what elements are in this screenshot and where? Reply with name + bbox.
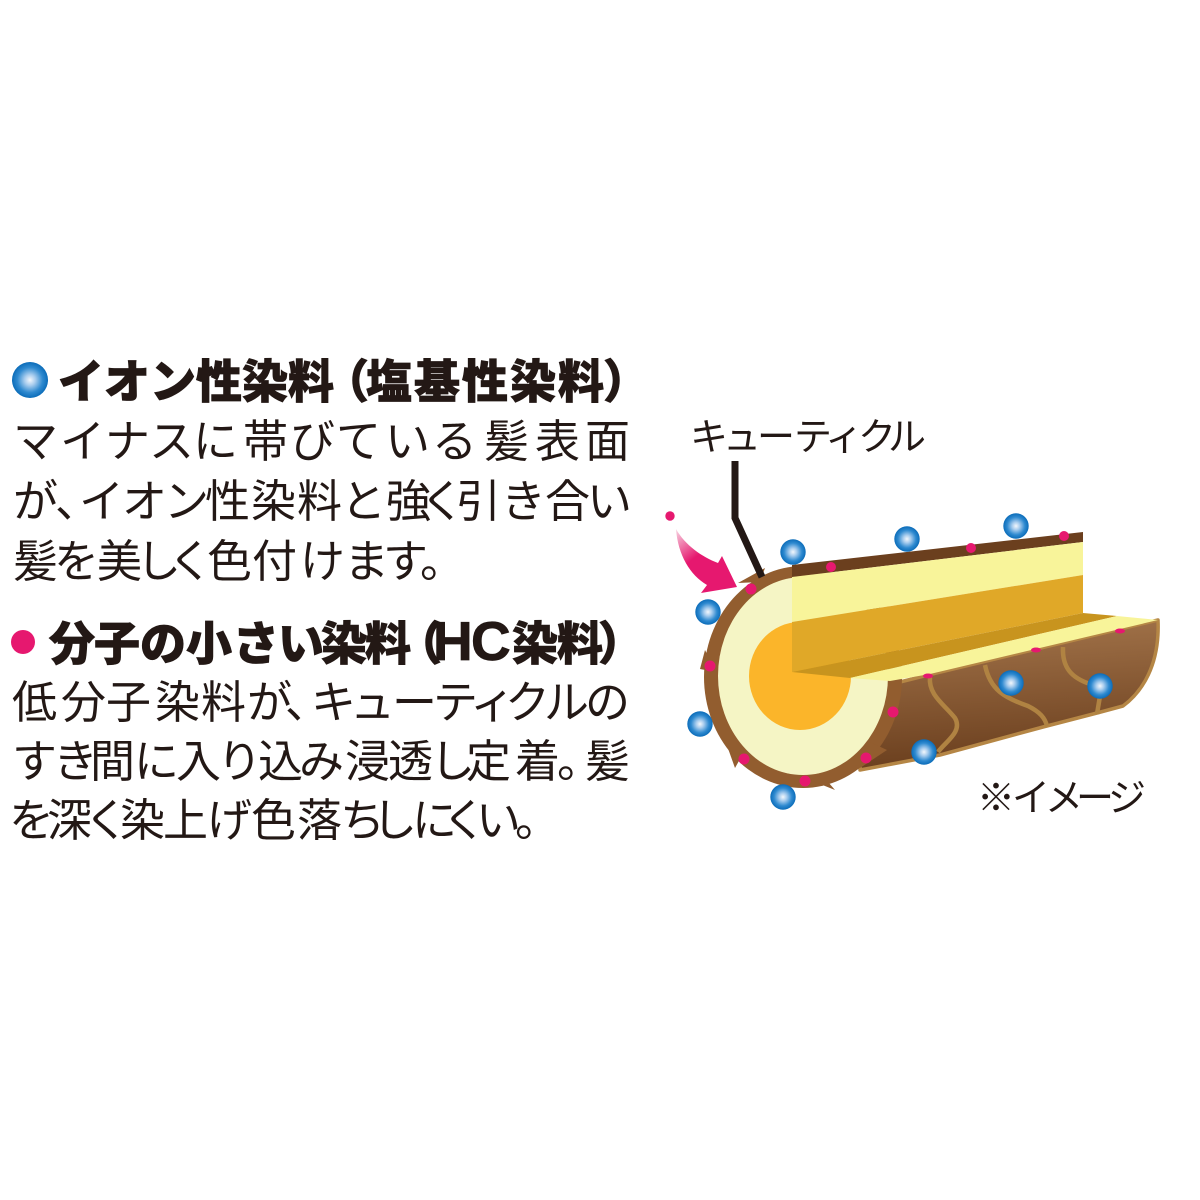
heading: HC dye: 染料） bbox=[512, 618, 644, 670]
heading: HC dye: HC bbox=[433, 610, 511, 672]
label: cuticle: キューティクル bbox=[690, 417, 926, 459]
blue ionic dye molecules bbox=[687, 513, 1113, 810]
hair outer surface bbox=[860, 620, 1158, 770]
icon: pink molecule bullet bbox=[11, 630, 35, 654]
pink HC dye molecules bbox=[704, 531, 1125, 786]
text: HC dye description bbox=[9, 677, 630, 846]
heading: ionic dye: イオン性染料（塩基性染料） bbox=[58, 356, 649, 408]
text: ionic dye description: 髪を美しく色付けます。 bbox=[13, 536, 465, 587]
text: ionic dye description: が、イオン性染料と強く引き合い bbox=[13, 476, 632, 527]
icon: blue ion bullet bbox=[12, 362, 48, 398]
arrow: dye entering cuticle bbox=[665, 511, 737, 593]
medulla core bbox=[749, 622, 851, 730]
heading: HC dye: 分子の小さい染料（ bbox=[49, 618, 442, 670]
section: small molecule dye bbox=[9, 610, 644, 846]
text: HC dye description: 低分子染料が、キューティクルの bbox=[12, 677, 630, 728]
cuticle scale lines bbox=[930, 647, 1100, 752]
cuticle ring with ragged scales bbox=[700, 566, 902, 790]
text: HC dye description: を深く染上げ色落ちしにくい。 bbox=[9, 795, 560, 846]
note: image only: ※イメージ bbox=[977, 778, 1146, 820]
text: HC dye description: すき間に入り込み浸透し定着。髪 bbox=[12, 736, 630, 787]
cut-away block bbox=[792, 532, 1158, 681]
leader line bbox=[735, 461, 762, 577]
diagram: hair cross-section bbox=[665, 417, 1158, 820]
text: ionic dye description: マイナスに帯びている髪表面 bbox=[13, 416, 630, 467]
section: ionic dye bbox=[12, 356, 649, 587]
cortex ring bbox=[718, 577, 888, 775]
text: ionic dye description bbox=[13, 416, 632, 587]
